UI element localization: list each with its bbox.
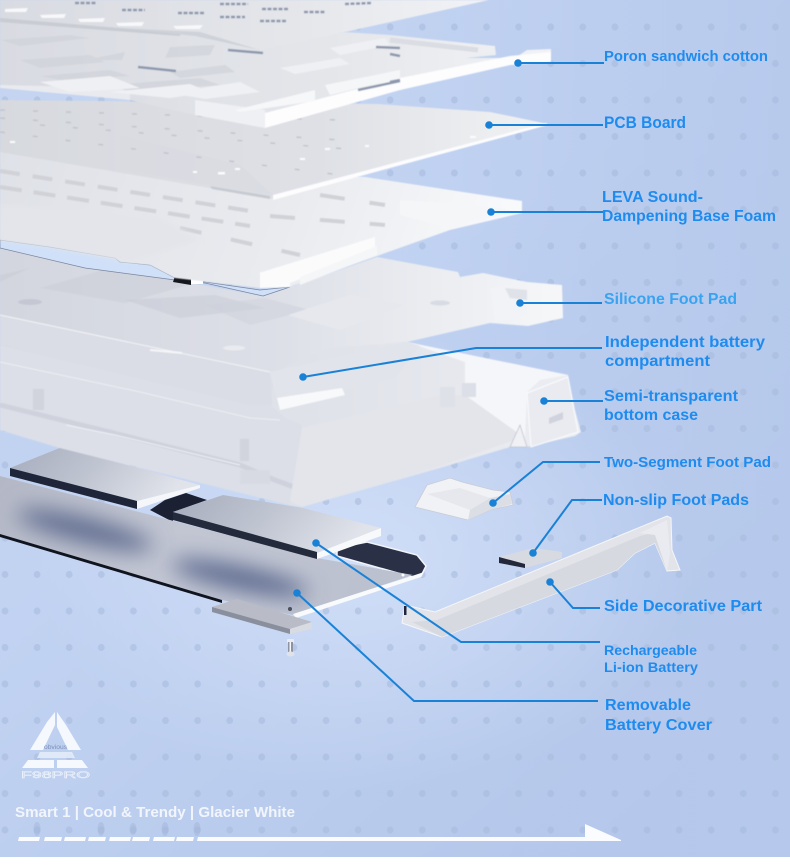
leader line [516, 299, 602, 307]
leader line [293, 589, 598, 701]
label: LEVA Sound- [602, 189, 703, 206]
arrow: dashed progress arrow [18, 824, 621, 841]
label: Semi-transparent [604, 388, 739, 405]
callout: Side Decorative Part [546, 578, 763, 615]
panel: LEVA sound-dampening base foam [0, 150, 522, 288]
callout: Rechargeable Li-ion Battery [312, 539, 698, 675]
leader line [489, 462, 600, 507]
label: Side Decorative Part [604, 598, 763, 615]
leader line [487, 208, 603, 216]
label: Dampening Base Foam [602, 208, 776, 225]
tagline: Smart 1 | Cool & Trendy | Glacier White [15, 804, 295, 821]
label: Independent battery [605, 334, 765, 351]
callout: Independent battery compartment [299, 334, 765, 381]
leader line [514, 59, 604, 67]
logo: F98PRO triangle mark: F98PRO [21, 770, 90, 780]
leader line [529, 500, 602, 557]
leader line [485, 121, 603, 129]
callout: LEVA foam [487, 189, 776, 225]
icon: screw [286, 639, 294, 656]
leader line [299, 348, 602, 381]
label: Li-ion Battery [604, 659, 698, 675]
panel: PCB board [0, 100, 548, 200]
label: Removable [605, 697, 691, 714]
panel: semi-transparent bottom case [0, 342, 581, 507]
label: bottom case [604, 407, 698, 424]
icon: non-slip foot pad [499, 548, 562, 568]
label: Non-slip Foot Pads [603, 492, 749, 509]
label: Poron sandwich cotton [604, 48, 768, 65]
label: compartment [605, 353, 711, 370]
label: Silicone Foot Pad [604, 291, 737, 308]
leader line [546, 578, 600, 608]
callout: Non-slip Foot Pads [529, 492, 749, 557]
leader line [312, 539, 600, 642]
callout: Semi-transparent bottom case [540, 388, 739, 424]
icon: side decorative part [402, 516, 680, 637]
icon: removable battery cover sheet [0, 476, 426, 618]
label: PCB Board [604, 113, 686, 132]
icon: two-segment foot pad [415, 478, 513, 520]
label: Rechargeable [604, 642, 697, 658]
callout: Removable Battery Cover [293, 589, 712, 734]
logo: F98PRO triangle mark [21, 712, 90, 780]
icon: small metal foot plate [212, 599, 312, 634]
callout: Two-Segment Foot Pad [489, 454, 771, 507]
panel: top plate with switch slots [0, 0, 489, 50]
callout: Silicone Foot Pad [516, 291, 737, 308]
panel: silicone foot pad layer / case plate [0, 248, 563, 410]
icon: front battery cell [173, 495, 381, 559]
blue gap and connector below foam [0, 240, 290, 296]
callout: PCB Board [485, 113, 686, 132]
label: Two-Segment Foot Pad [604, 454, 771, 471]
icon: rear battery cell [10, 447, 200, 509]
label: Battery Cover [605, 717, 712, 734]
leader line [540, 397, 603, 405]
panel: poron sandwich cotton [0, 20, 551, 128]
logo: F98PRO triangle mark: obvious [44, 745, 67, 751]
callout: Poron sandwich cotton [514, 48, 768, 67]
